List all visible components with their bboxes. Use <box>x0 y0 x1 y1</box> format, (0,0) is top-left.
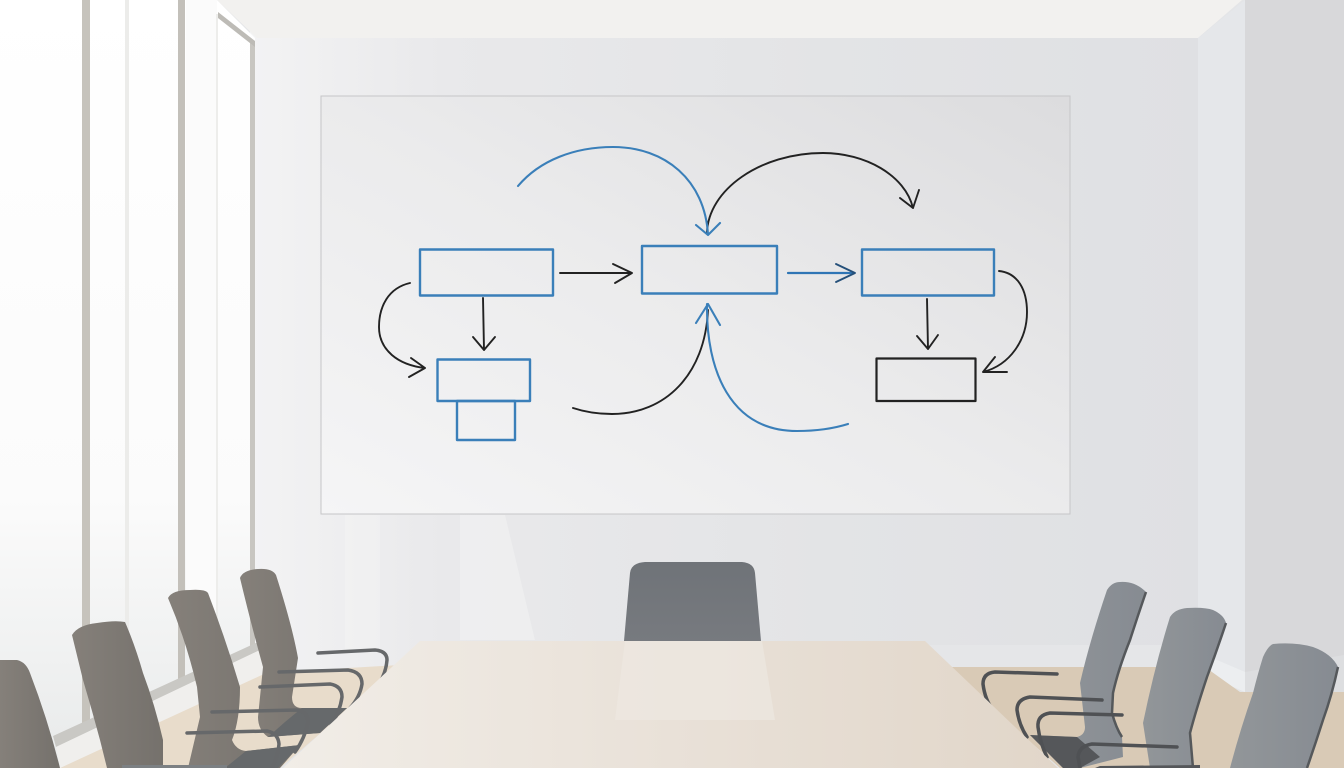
box: top centre <box>642 246 777 294</box>
conference table <box>283 641 1058 768</box>
box: top right <box>862 250 994 296</box>
arrow: right curve <box>983 271 1027 372</box>
chair left 4 <box>240 569 387 737</box>
skirting <box>925 645 1205 667</box>
chair left 2 <box>72 621 227 768</box>
arrow: black bottom curve <box>573 310 708 414</box>
arrow: right box down <box>917 299 938 349</box>
chair left 3 <box>168 590 342 768</box>
arrow: left to centre <box>560 264 632 283</box>
back wall <box>250 30 1210 680</box>
box: lower right <box>876 358 976 401</box>
chair right 2 <box>1230 643 1338 768</box>
arrow: left box down <box>473 298 495 350</box>
whiteboard panel <box>321 96 1070 514</box>
arrow: centre to right <box>788 264 855 282</box>
ceiling <box>217 0 1242 38</box>
chair right 3 <box>1078 608 1226 768</box>
chair left 1 <box>0 660 60 768</box>
box: lower left upper <box>438 360 530 401</box>
arrow: blue bottom curve <box>696 304 848 431</box>
wall light patches <box>345 515 535 650</box>
chairs: right side <box>983 582 1338 768</box>
box: top left <box>420 250 553 296</box>
arrow: black top curve <box>707 153 919 233</box>
box: lower left base <box>457 401 515 440</box>
right wall <box>1198 0 1344 692</box>
windows <box>0 0 264 768</box>
chairs: left side <box>0 569 387 768</box>
flow diagram <box>379 147 1027 440</box>
chair: back centre <box>624 562 761 641</box>
floor right <box>945 667 1344 768</box>
arrow: blue top curve <box>518 147 720 235</box>
chair right 4 <box>983 582 1146 768</box>
floor left <box>60 665 400 768</box>
arrow: left curve <box>379 283 425 377</box>
